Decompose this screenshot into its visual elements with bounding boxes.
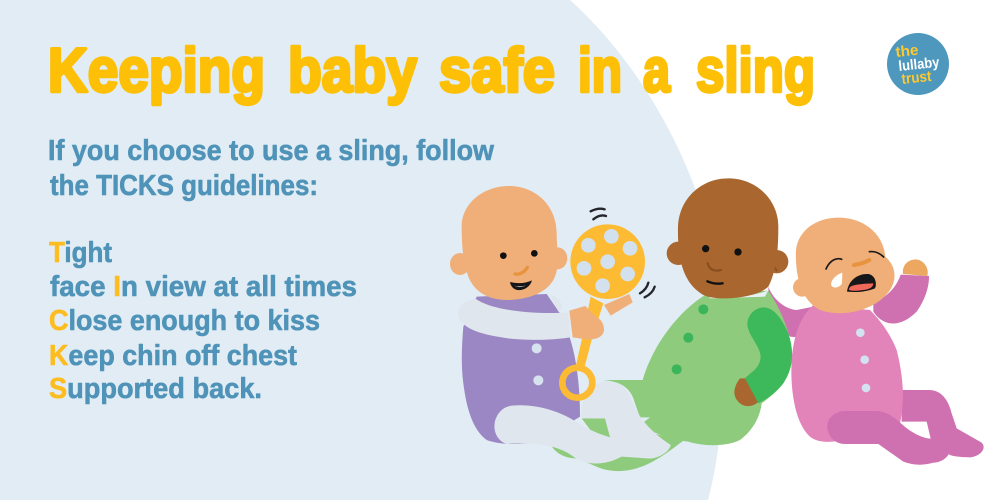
title: baby — [288, 36, 417, 106]
intro text: the TICKS guidelines: — [50, 170, 318, 202]
motion lines — [591, 209, 655, 297]
title: sling — [696, 36, 815, 106]
logo: the lullaby trust — [887, 33, 949, 95]
TICKS list: Tight — [49, 237, 112, 269]
TICKS list: Keep chin off chest — [49, 340, 297, 372]
logo: the lullaby trust: trust — [901, 68, 932, 88]
baby in pink, crying — [768, 218, 984, 465]
baby in purple with sling and rattle — [450, 186, 671, 464]
title: Keeping — [48, 36, 265, 106]
title: a — [643, 36, 670, 106]
background: pale blue curved panel — [0, 0, 723, 500]
TICKS list — [49, 237, 357, 405]
sling legs — [494, 381, 671, 464]
logo: the lullaby trust: the — [895, 42, 919, 61]
intro text — [48, 135, 494, 202]
title: in — [578, 36, 622, 106]
intro text: If you choose to use a sling, follow — [48, 135, 494, 167]
logo: the lullaby trust: lullaby — [898, 55, 940, 75]
title: safe — [439, 36, 555, 106]
TICKS list: face In view at all times — [50, 271, 357, 303]
baby in green, brown skin — [550, 178, 792, 471]
TICKS list: Close enough to kiss — [49, 305, 320, 337]
TICKS list: Supported back. — [49, 373, 262, 405]
rattle — [562, 224, 645, 398]
title — [48, 36, 815, 106]
sling strap — [458, 294, 570, 340]
